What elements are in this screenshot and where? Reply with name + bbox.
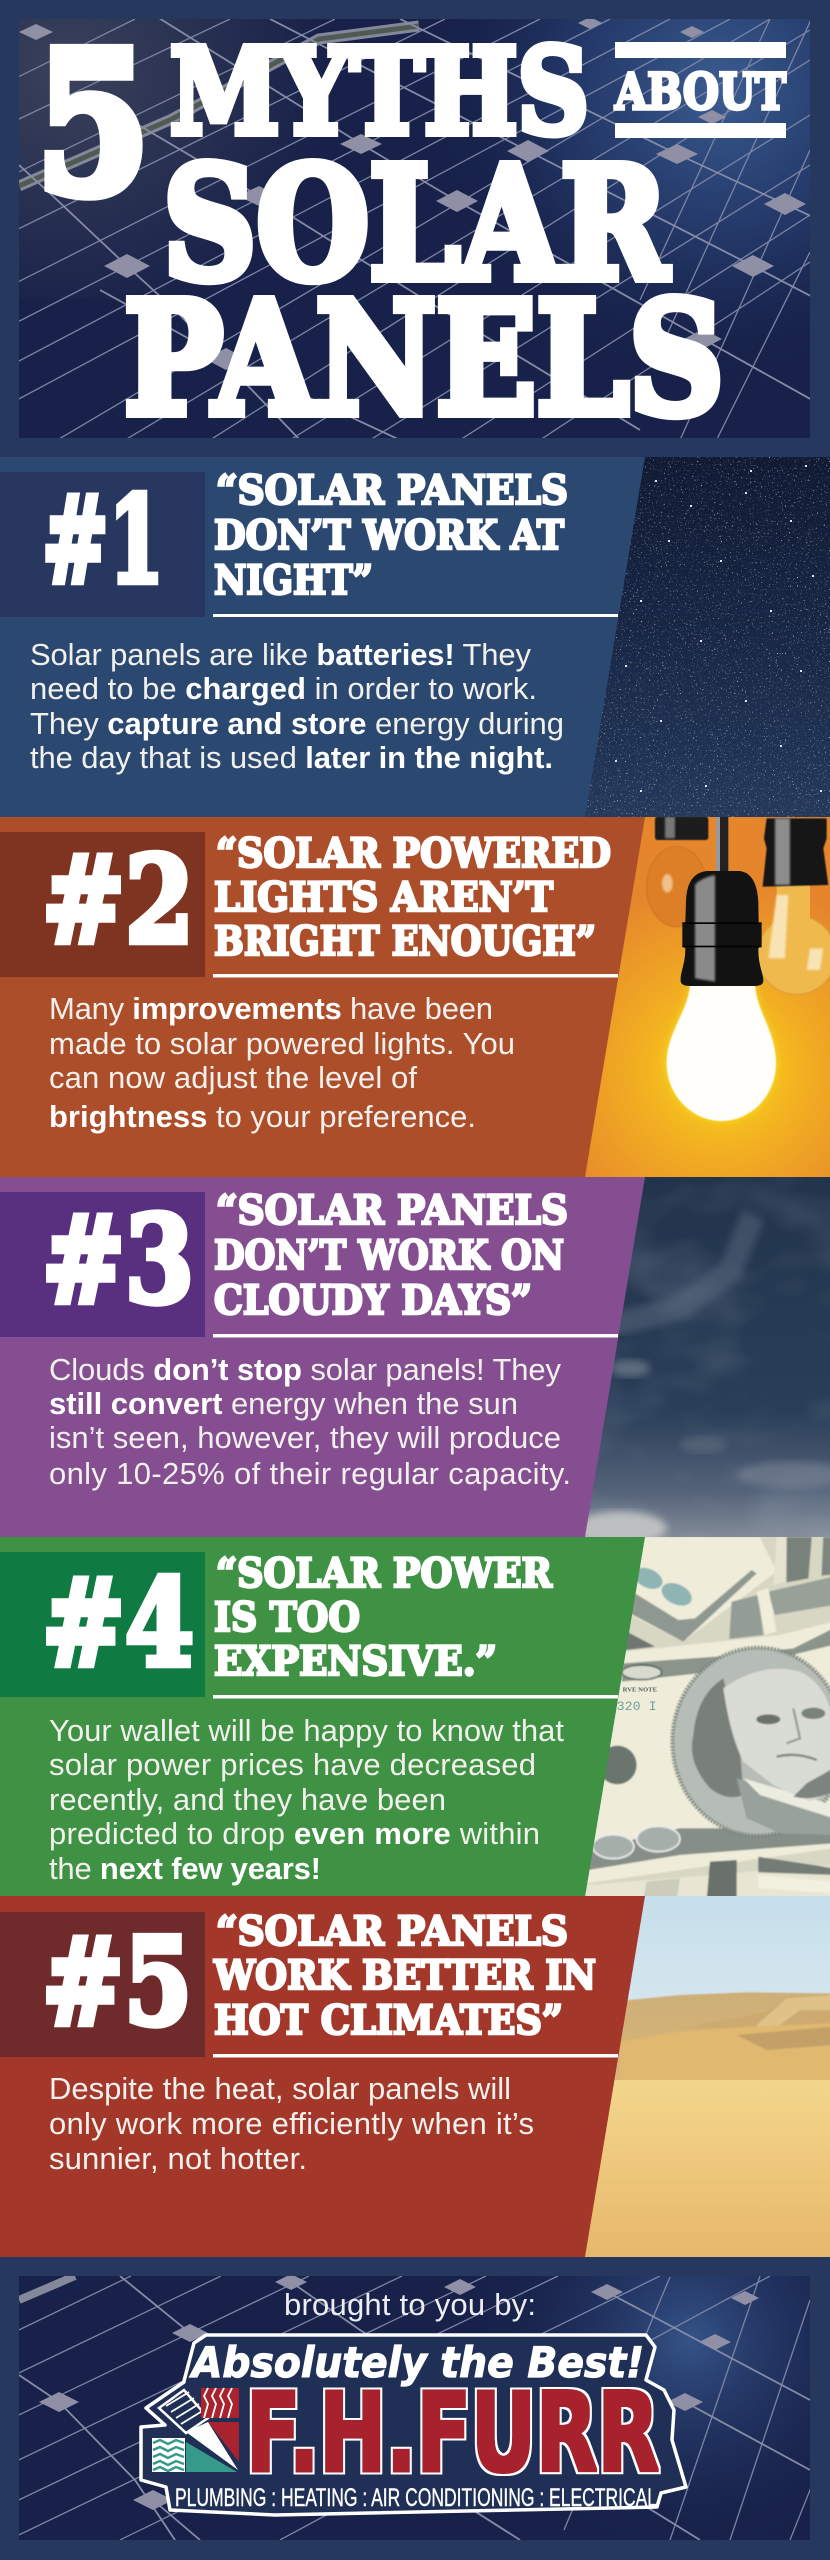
myth 1 body text	[30, 637, 564, 775]
myth 2 heading: BRIGHT ENOUGH”	[214, 918, 596, 965]
myth 4 heading: EXPENSIVE.”	[214, 1638, 497, 1685]
number box 2: #2	[42, 830, 194, 971]
myth 1 body text: Solar panels are like batteries! They	[30, 637, 532, 672]
solar panel background	[0, 0, 830, 440]
myth 2 heading: LIGHTS AREN’T	[214, 874, 553, 921]
myth 2 body text	[49, 991, 515, 1134]
title: SOLAR: SOLAR	[163, 132, 669, 315]
myth 2 body text: Many improvements have been	[49, 991, 493, 1026]
panel: footer	[0, 2274, 830, 2544]
myth 2 body text: can now adjust the level of	[49, 1060, 417, 1095]
number box 3: #3	[42, 1190, 194, 1331]
number box 4: #4	[42, 1553, 194, 1694]
myth 1 body text: the day that is used later in the night.	[30, 740, 553, 775]
myth 1 heading	[213, 467, 618, 617]
myth 3 body text	[49, 1352, 571, 1491]
number box 1: #1	[42, 470, 164, 611]
myth 3 body text: Clouds don’t stop solar panels! They	[49, 1352, 562, 1387]
photo: light bulbs	[560, 817, 830, 1177]
myth 2 heading: “SOLAR POWERED	[216, 830, 611, 877]
photo: dollar bills: RVE NOTE	[623, 1687, 658, 1694]
photo: desert dunes	[560, 1896, 830, 2260]
myth 5 body text	[49, 2071, 534, 2176]
myth 4 body text: solar power prices have decreased	[49, 1747, 536, 1782]
logo wordmark: F.H.FURR	[246, 2369, 659, 2497]
myth 4 heading	[213, 1550, 618, 1698]
myth 4 heading: “SOLAR POWER	[216, 1550, 553, 1597]
myth 4 body text	[49, 1713, 564, 1886]
photo: dollar bills: 320 I	[617, 1700, 657, 1715]
myth 2 band	[0, 817, 645, 1177]
myth 3 band	[0, 1177, 645, 1537]
myth 4 body text: predicted to drop even more within	[49, 1816, 540, 1851]
number box 1	[0, 470, 205, 617]
myth 1 band	[0, 457, 645, 817]
title: ABOUT with rules: ABOUT	[614, 62, 786, 121]
photo: night sky	[585, 457, 830, 817]
myth 1 body text: They capture and store energy during	[30, 706, 564, 741]
footer solar panel background	[0, 2274, 830, 2544]
panel: myth 5	[0, 1896, 830, 2260]
myth 3 body text: still convert energy when the sun	[49, 1386, 518, 1421]
panel: myth 2	[0, 817, 830, 1177]
myth 1 body text: need to be charged in order to work.	[30, 671, 537, 706]
panel: myth 1	[0, 457, 830, 817]
photo: dollar bills	[585, 1537, 830, 1896]
logo outline	[141, 2335, 686, 2515]
myth 5 band	[0, 1896, 645, 2257]
myth 2 body text: brightness to your preference.	[49, 1099, 476, 1134]
title: PANELS: PANELS	[124, 267, 724, 450]
panel: header	[19, 19, 810, 438]
myth 5 heading: HOT CLIMATES”	[214, 1997, 563, 2044]
myth 1 heading: NIGHT”	[214, 557, 373, 604]
myth 2 body text: made to solar powered lights. You	[49, 1026, 515, 1061]
myth 3 heading	[213, 1187, 618, 1338]
number box 3	[0, 1190, 205, 1337]
myth 1 heading: “SOLAR PANELS	[216, 467, 568, 514]
myth 1 heading: DON’T WORK AT	[214, 512, 564, 559]
myth 5 body text: sunnier, not hotter.	[49, 2141, 307, 2176]
panel: myth 4	[0, 1535, 830, 1902]
myth 5 heading: WORK BETTER IN	[213, 1952, 596, 1999]
myth 4 body text: the next few years!	[49, 1851, 321, 1886]
title: ABOUT with rules	[614, 42, 786, 138]
myth 3 body text: isn’t seen, however, they will produce	[49, 1420, 561, 1455]
logo icon	[152, 2388, 239, 2472]
number box 2	[0, 830, 205, 977]
photo: storm clouds	[585, 1177, 830, 1537]
logo: F.H. Furr	[141, 2335, 686, 2515]
myth 4 heading: IS TOO	[214, 1594, 360, 1641]
myth 5 body text: Despite the heat, solar panels will	[49, 2071, 511, 2106]
myth 3 heading: DON’T WORK ON	[214, 1232, 564, 1279]
myth 3 heading: CLOUDY DAYS”	[214, 1277, 532, 1324]
myth 4 band	[0, 1537, 645, 1897]
number box 5: #5	[42, 1912, 192, 2053]
myth 5 body text: only work more efficiently when it’s	[49, 2106, 534, 2141]
title: 5: 5	[36, 9, 150, 238]
myth 2 heading	[213, 830, 618, 978]
myth 5 heading: “SOLAR PANELS	[216, 1908, 568, 1955]
myth 4 body text: Your wallet will be happy to know that	[49, 1713, 564, 1748]
panel: myth 3	[0, 1177, 830, 1545]
myth 3 heading: “SOLAR PANELS	[216, 1187, 568, 1234]
myth 4 body text: recently, and they have been	[49, 1782, 446, 1817]
myth 5 heading	[213, 1908, 618, 2058]
title: MYTHS: MYTHS	[170, 22, 589, 161]
brought to you by: brought to you by:	[284, 2287, 536, 2322]
myth 3 body text: only 10-25% of their regular capacity.	[49, 1456, 571, 1491]
logo slogan: Absolutely the Best!	[189, 2338, 644, 2387]
